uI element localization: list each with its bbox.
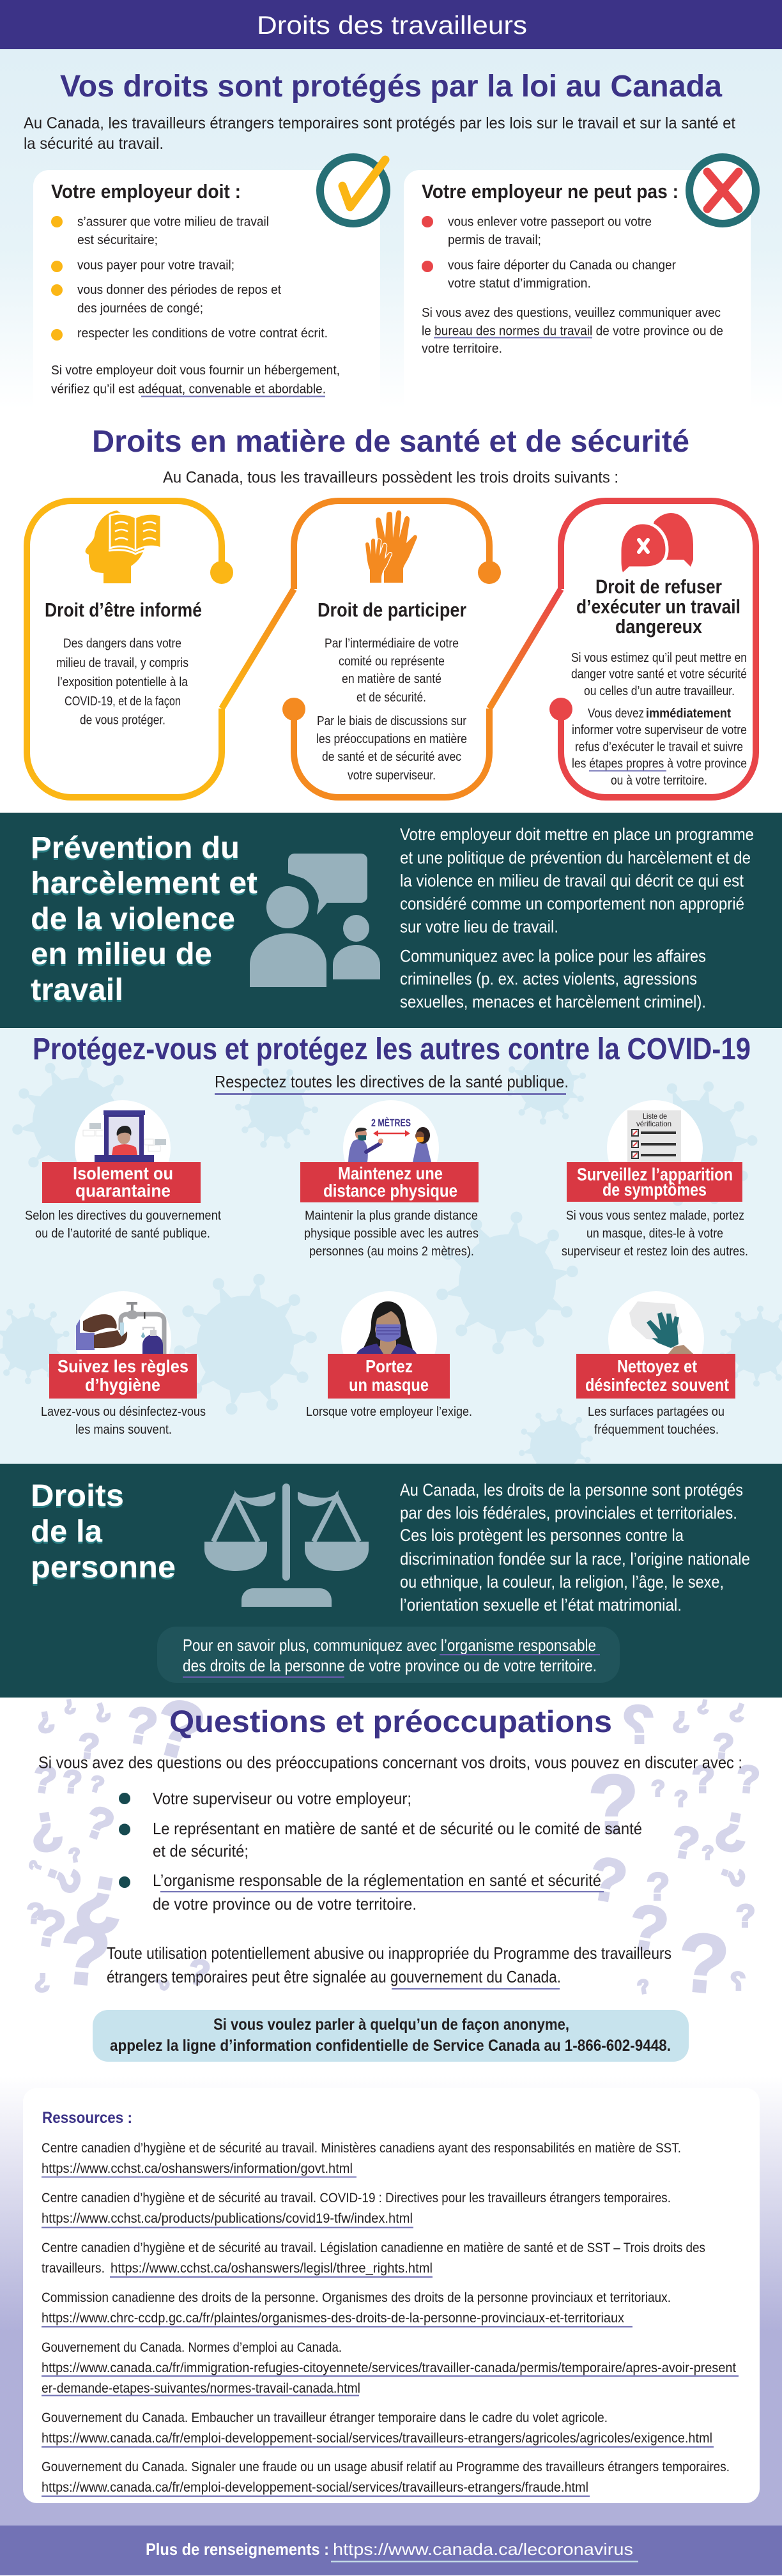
icon: head with book — [86, 510, 162, 583]
panel: Droit de participer — [282, 501, 561, 797]
card: masque — [306, 1291, 472, 1419]
resource 7: Gouvernement du Canada. Signaler une fraude ou un usage abusif relatif au Programme des travailleurs étrangers temporaires. — [42, 2460, 730, 2474]
resource 7: https://www.canada.ca/fr/emploi-developpement-social/services/travailleurs-etrangers/fraude.html — [42, 2480, 588, 2495]
label: un masque — [349, 1375, 429, 1395]
heading: Vos droits: Vos droits sont protégés par la loi au Canada — [60, 70, 722, 103]
background question marks: ? — [36, 1857, 92, 1900]
label: distance physique — [323, 1181, 457, 1200]
resource 2: Centre canadien d’hygiène et de sécurité au travail. COVID-19 : Directives pour les travailleurs étrangers temporaires. — [42, 2191, 671, 2205]
subheading: public health: Respectez toutes les directives de la santé publique. — [215, 1072, 569, 1091]
resource 4: Commission canadienne des droits de la personne. Organismes des droits de la personne provinciaux et territoriaux. — [42, 2290, 671, 2305]
intro paragraph: Au Canada, les travailleurs étrangers temporaires sont protégés par les lois sur le travail et sur la santé et — [24, 114, 735, 132]
text: human rights laws: par des lois fédérales, provinciales et territoriales. — [400, 1503, 737, 1522]
frame red — [549, 501, 756, 797]
callout: anonymous line: appelez la ligne d’information confidentielle de Service Canada au 1-866-602-9448. — [110, 2037, 671, 2055]
resource 3: Centre canadien d’hygiène et de sécurité au travail. Législation canadienne en matière de santé et de SST – Trois droits des — [42, 2241, 705, 2255]
heading — [31, 831, 257, 1009]
resource 4: https://www.chrc-ccdp.gc.ca/fr/plaintes/organismes-des-droits-de-la-personne-provinciaux-et-territoriaux — [42, 2311, 624, 2326]
background question marks: ? — [29, 1756, 60, 1802]
resource 3 — [42, 2241, 705, 2278]
heading: ne peut pas: Votre employeur ne peut pas : — [422, 180, 678, 203]
resource 6: https://www.canada.ca/fr/emploi-developpement-social/services/travailleurs-etrangers/agricoles/agricoles/exigence.html — [42, 2431, 712, 2446]
heading: Droits — [31, 1479, 124, 1513]
description: danger votre santé et votre sécurité — [571, 667, 747, 681]
label: Suivez les règles — [57, 1356, 188, 1376]
background question marks: ? — [674, 1915, 733, 2012]
heading — [31, 1479, 176, 1586]
heading: de la — [31, 1515, 102, 1549]
background question marks: ? — [78, 1795, 121, 1851]
resource 5: https://www.canada.ca/fr/immigration-refugies-citoyennete/services/travailler-canada/permis/temporaire/apres-avoir-present — [42, 2361, 736, 2375]
background question marks: ? — [674, 1787, 688, 1812]
text: report misuse: étrangers temporaires peut être signalée au gouvernement du Canada. — [107, 1967, 561, 1986]
background question marks: ? — [730, 1967, 746, 1995]
background question marks: ? — [61, 1763, 84, 1800]
label — [328, 1354, 450, 1399]
title: d’exécuter un travail — [576, 595, 740, 618]
description: Par le biais de discussions sur — [317, 714, 466, 728]
list: contacts: de votre province ou de votre territoire. — [153, 1894, 417, 1913]
description: votre superviseur. — [348, 768, 436, 783]
description — [25, 1208, 221, 1241]
heading: de la — [31, 1517, 102, 1551]
callout: learn more: des droits de la personne de votre province ou de votre territoire. — [183, 1656, 597, 1675]
intro paragraph — [24, 114, 735, 153]
background question marks: ? — [90, 1696, 114, 1728]
icon: check mark — [320, 157, 387, 224]
description — [588, 1404, 724, 1437]
resource 2 — [42, 2191, 671, 2228]
label: désinfectez souvent — [585, 1375, 729, 1395]
icon: raised hands — [365, 510, 417, 583]
description: les préoccupations en matière — [316, 732, 467, 746]
list: contacts — [153, 1789, 642, 1913]
label: Portez — [365, 1356, 413, 1376]
resource 7 — [42, 2460, 730, 2497]
description — [56, 636, 188, 727]
bullets yellow — [51, 216, 63, 341]
description: de vous protéger. — [80, 713, 165, 727]
resource 6 — [42, 2411, 714, 2448]
panel: COVID-19 background — [0, 1028, 782, 1464]
icon: checklist — [627, 1110, 681, 1162]
list: employer prohibitions — [448, 215, 676, 291]
description: en matière de santé — [342, 671, 441, 686]
label — [576, 1354, 735, 1399]
resource 5 — [42, 2340, 739, 2396]
heading: de la violence — [31, 902, 235, 936]
list: employer duties: respecter les conditions de votre contrat écrit. — [77, 326, 328, 341]
background question marks: ? — [588, 1758, 639, 1851]
panel: Droit de refuser — [549, 501, 756, 797]
heading: travail — [31, 973, 123, 1007]
resource 1 — [42, 2141, 681, 2177]
card: isolement — [25, 1100, 221, 1241]
card: nettoyez — [576, 1291, 735, 1437]
description: fréquemment touchées. — [594, 1422, 719, 1437]
heading: doit: Votre employeur doit : — [51, 180, 241, 203]
description: ou celles d’un autre travailleur. — [584, 684, 735, 698]
description: comité ou représente — [339, 654, 445, 668]
background question marks: ? — [622, 1695, 655, 1756]
footer: plus de renseignements: https://www.canada.ca/lecoronavirus — [333, 2540, 633, 2559]
heading: Prévention du — [31, 831, 240, 865]
text: prevention policy — [400, 825, 754, 1011]
title — [576, 575, 740, 638]
resource 1: https://www.cchst.ca/oshanswers/information/govt.html — [42, 2161, 353, 2176]
icon: checklist: Liste de — [643, 1112, 667, 1121]
background question marks: ? — [623, 1890, 673, 1967]
description: Si vous estimez qu’il peut mettre en — [571, 650, 747, 665]
icon: two people 2 metres: 2 MÈTRES — [371, 1117, 411, 1129]
heading: Prévention du — [31, 833, 240, 867]
description: milieu de travail, y compris — [56, 656, 188, 670]
heading: travail — [31, 975, 123, 1009]
description: ou de l’autorité de santé publique. — [35, 1226, 210, 1241]
icon: woman with mask — [356, 1301, 417, 1354]
description: Lorsque votre employeur l’exige. — [306, 1404, 472, 1419]
list: contacts: Le représentant en matière de santé et de sécurité ou le comité de santé — [153, 1819, 642, 1838]
description: un masque, dites-le à votre — [586, 1226, 723, 1241]
heading: personne — [31, 1551, 176, 1584]
resource 6: Gouvernement du Canada. Embaucher un travailleur étranger temporaire dans le cadre du volet agricole. — [42, 2411, 608, 2425]
background question marks: ? — [67, 1844, 82, 1867]
title: dangereux — [615, 615, 703, 638]
title: Droit de participer — [318, 599, 466, 621]
card: symptômes — [562, 1100, 748, 1259]
resource 5: Gouvernement du Canada. Normes d’emploi au Canada. — [42, 2340, 342, 2355]
heading: Droits — [31, 1481, 124, 1515]
description: Selon les directives du gouvernement — [25, 1208, 221, 1223]
description: COVID-19, et de la façon — [65, 694, 181, 709]
resource 3: travailleurs. — [42, 2261, 105, 2276]
list bullets — [119, 1793, 130, 1888]
description — [316, 636, 467, 783]
background question marks: ? — [668, 1816, 703, 1869]
text: human rights laws: l’orientation sexuelle et l’état matrimonial. — [400, 1595, 682, 1614]
label — [567, 1162, 742, 1202]
description: Si vous vous sentez malade, portez — [566, 1208, 744, 1223]
label — [42, 1162, 201, 1203]
text: prevention policy: Communiquez avec la police pour les affaires — [400, 947, 706, 966]
callout: anonymous line — [93, 2010, 689, 2062]
description: Des dangers dans votre — [63, 636, 181, 650]
list: employer duties: est sécuritaire; — [77, 233, 158, 247]
panel: ressources — [23, 2088, 760, 2503]
description: et de sécurité. — [356, 690, 426, 705]
background question marks: ? — [651, 1777, 665, 1802]
background question marks: ? — [62, 1695, 77, 1718]
background question marks: ¿ — [70, 1844, 134, 1941]
description: Par l’intermédiaire de votre — [325, 636, 459, 650]
heading: Droits en matière de santé: Droits en matière de santé et de sécurité — [92, 425, 689, 459]
text: report misuse: Toute utilisation potentiellement abusive ou inappropriée du Programme des travailleurs — [107, 1943, 671, 1963]
text: prevention policy: criminelles (p. ex. actes violents, agressions — [400, 969, 697, 988]
background question marks: ? — [185, 1951, 213, 1993]
list: employer prohibitions: votre statut d’immigration. — [448, 276, 591, 291]
note: labour standards office — [422, 305, 723, 356]
description: superviseur et restez loin des autres. — [562, 1244, 748, 1259]
background question marks — [24, 1680, 762, 2012]
list: employer prohibitions: vous enlever votre passeport ou votre — [448, 215, 652, 229]
background question marks: ? — [726, 1696, 750, 1728]
callout: learn more: Pour en savoir plus, communiquez avec l’organisme responsable — [183, 1636, 596, 1655]
background question marks: ? — [736, 1898, 755, 1934]
list: employer duties — [77, 215, 328, 341]
footer: plus de renseignements — [0, 2526, 782, 2575]
label: Isolement ou — [73, 1163, 173, 1183]
panel: Votre employeur doit — [33, 170, 380, 409]
list: employer duties: s’assurer que votre milieu de travail — [77, 215, 269, 229]
description: l’exposition potentielle à la — [57, 675, 188, 689]
resource 1: Centre canadien d’hygiène et de sécurité au travail. Ministères canadiens ayant des responsabilités en matière de SST. — [42, 2141, 681, 2156]
note: accommodation: vérifiez qu’il est adéquat, convenable et abordable. — [51, 382, 326, 396]
description: de santé et de sécurité avec — [322, 749, 461, 764]
description: Lavez-vous ou désinfectez-vous — [41, 1404, 206, 1419]
text: human rights laws: Au Canada, les droits de la personne sont protégés — [400, 1480, 743, 1499]
description: refus d’exécuter le travail et suivre — [575, 740, 743, 754]
icon: speech bubbles with cross — [620, 513, 693, 575]
text: prevention policy: considéré comme un comportement non approprié — [400, 894, 744, 914]
banner: Droits des travailleurs: Droits des travailleurs — [257, 12, 527, 40]
resource 4 — [42, 2290, 671, 2327]
text: prevention policy: et une politique de prévention du harcèlement et de — [400, 848, 751, 868]
background question marks: ? — [25, 1896, 45, 1930]
background question marks: ? — [636, 1975, 651, 1998]
title: Droit d’être informé — [45, 599, 202, 621]
list: employer duties: vous donner des périodes de repos et — [77, 282, 281, 297]
list: employer prohibitions: permis de travail; — [448, 233, 541, 247]
list: employer prohibitions: vous faire déporter du Canada ou changer — [448, 258, 676, 272]
heading: en milieu de — [31, 937, 212, 971]
heading: en milieu de — [31, 939, 212, 973]
heading: personne — [31, 1552, 176, 1586]
label: quarantaine — [75, 1181, 171, 1200]
background question marks: ¿ — [24, 1791, 66, 1857]
text: prevention policy: sexuelles, menaces et harcèlement criminel). — [400, 992, 706, 1011]
resource 2: https://www.cchst.ca/products/publications/covid19-tfw/index.html — [42, 2211, 413, 2226]
background question marks: ? — [29, 1897, 70, 1959]
background question marks: ? — [696, 1695, 711, 1718]
note: labour standards office: le bureau des normes du travail de votre province ou de — [422, 323, 723, 339]
card: hygiène — [41, 1291, 206, 1437]
icon: checklist: vérification — [636, 1119, 671, 1128]
icon: person at window — [83, 1110, 166, 1162]
note: accommodation: Si votre employeur doit vous fournir un hébergement, — [51, 363, 340, 378]
background question marks: ? — [144, 1680, 214, 1779]
heading: harcèlement et — [31, 868, 257, 902]
background question marks: ? — [647, 1866, 670, 1908]
description — [41, 1404, 206, 1437]
background question marks: ¿ — [712, 1791, 755, 1857]
list: contacts: Votre superviseur ou votre employeur; — [153, 1789, 411, 1808]
icon: two people 2 metres — [348, 1117, 431, 1162]
heading: Ressources: Ressources : — [42, 2109, 132, 2127]
background question marks: ? — [692, 1758, 715, 1801]
text: human rights laws — [400, 1480, 750, 1614]
list: contacts: et de sécurité; — [153, 1841, 249, 1860]
panel: droits de la personne — [0, 1464, 782, 1698]
background question marks: ? — [76, 1725, 101, 1767]
intro paragraph: la sécurité au travail. — [24, 135, 164, 153]
callout: anonymous line: Si vous voulez parler à quelqu’un de façon anonyme, — [213, 2016, 569, 2034]
description — [571, 650, 747, 788]
label — [49, 1354, 197, 1399]
icon: cross — [689, 157, 756, 224]
heading: de la violence — [31, 904, 235, 938]
icon: hand washing — [76, 1303, 164, 1355]
description: Les surfaces partagées ou — [588, 1404, 724, 1419]
background question marks: ? — [735, 1757, 762, 1802]
panel: Droit d'être informé — [27, 501, 294, 797]
description — [304, 1208, 479, 1259]
background question marks: ? — [87, 1770, 107, 1798]
footer: plus de renseignements: Plus de renseignements : — [146, 2540, 329, 2559]
text: report misuse — [107, 1943, 671, 1989]
label: Maintenez une — [338, 1163, 443, 1183]
background question marks: ? — [150, 1973, 174, 1994]
list: employer duties: des journées de congé; — [77, 301, 203, 316]
frame orange — [282, 501, 561, 797]
background question marks: ? — [710, 1725, 735, 1767]
note: labour standards office: Si vous avez des questions, veuillez communiquer avec — [422, 305, 721, 320]
background question marks: ¿ — [672, 1701, 690, 1734]
label: Surveillez l’apparition — [577, 1164, 733, 1184]
text: prevention policy: la violence en milieu de travail qui décrit ce qui est — [400, 871, 744, 891]
label: Nettoyez et — [617, 1356, 697, 1376]
background question marks: ? — [26, 1858, 46, 1873]
resource 3: https://www.cchst.ca/oshanswers/legisl/three_rights.html — [111, 2261, 433, 2276]
icon: scales of justice — [204, 1483, 369, 1607]
text: human rights laws: ou ethnique, la couleur, la religion, l’âge, le sexe, — [400, 1572, 724, 1591]
description: immédiatement — [646, 706, 731, 721]
label: d’hygiène — [85, 1375, 160, 1395]
list: contacts: L’organisme responsable de la réglementation en santé et sécurité — [153, 1871, 601, 1890]
background viruses — [0, 1040, 782, 1487]
text: prevention policy: sur votre lieu de travail. — [400, 917, 558, 937]
background question marks: ? — [56, 1907, 114, 2004]
panel: Votre employeur ne peut pas — [404, 170, 751, 409]
heading: Questions: Questions et préoccupations — [169, 1705, 612, 1739]
icon: people talking — [250, 854, 380, 987]
description: Vous devez — [588, 706, 644, 721]
list: employer duties: vous payer pour votre travail; — [77, 258, 234, 272]
callout: learn more — [157, 1627, 620, 1683]
background question marks: ? — [584, 1844, 632, 1917]
panel: questions background — [0, 1698, 782, 2076]
description: ou à votre territoire. — [611, 773, 707, 788]
title: Droit de refuser — [595, 575, 722, 598]
subheading: trois droits: Au Canada, tous les travailleurs possèdent les trois droits suivants : — [163, 469, 618, 487]
description: personnes (au moins 2 mètres). — [309, 1244, 474, 1259]
frame yellow — [27, 501, 294, 797]
bullets red — [422, 216, 433, 272]
description: les étapes propres à votre province — [572, 756, 747, 770]
text: human rights laws: discrimination fondée sur la race, l’origine nationale — [400, 1549, 750, 1568]
banner: Droits des travailleurs — [0, 0, 782, 49]
description: Maintenir la plus grande distance — [305, 1208, 478, 1223]
panel: prévention du harcèlement — [0, 813, 782, 1028]
label: de symptômes — [602, 1179, 707, 1200]
text: human rights laws: Ces lois protègent les personnes contre la — [400, 1526, 684, 1545]
panel: top background — [0, 49, 782, 409]
note: accommodation — [51, 363, 340, 397]
label — [300, 1162, 479, 1202]
background question marks: ? — [121, 1695, 162, 1756]
description — [562, 1208, 748, 1259]
heading: harcèlement et — [31, 866, 257, 900]
card: distance physique — [300, 1100, 479, 1259]
note: labour standards office: votre territoire. — [422, 341, 502, 356]
icon: gloved hand with cloth — [629, 1301, 693, 1354]
background question marks: ? — [702, 1843, 714, 1864]
background question marks: ¿ — [34, 1965, 50, 1993]
description: informer votre superviseur de votre — [572, 723, 747, 737]
resource 5: er-demande-etapes-suivantes/normes-travail-canada.html — [42, 2381, 360, 2396]
panel: resources background — [0, 2076, 782, 2526]
background question marks: ? — [713, 1861, 753, 1892]
description: les mains souvent. — [75, 1422, 172, 1437]
background question marks: ¿ — [33, 1700, 56, 1735]
description: physique possible avec les autres — [304, 1226, 479, 1241]
